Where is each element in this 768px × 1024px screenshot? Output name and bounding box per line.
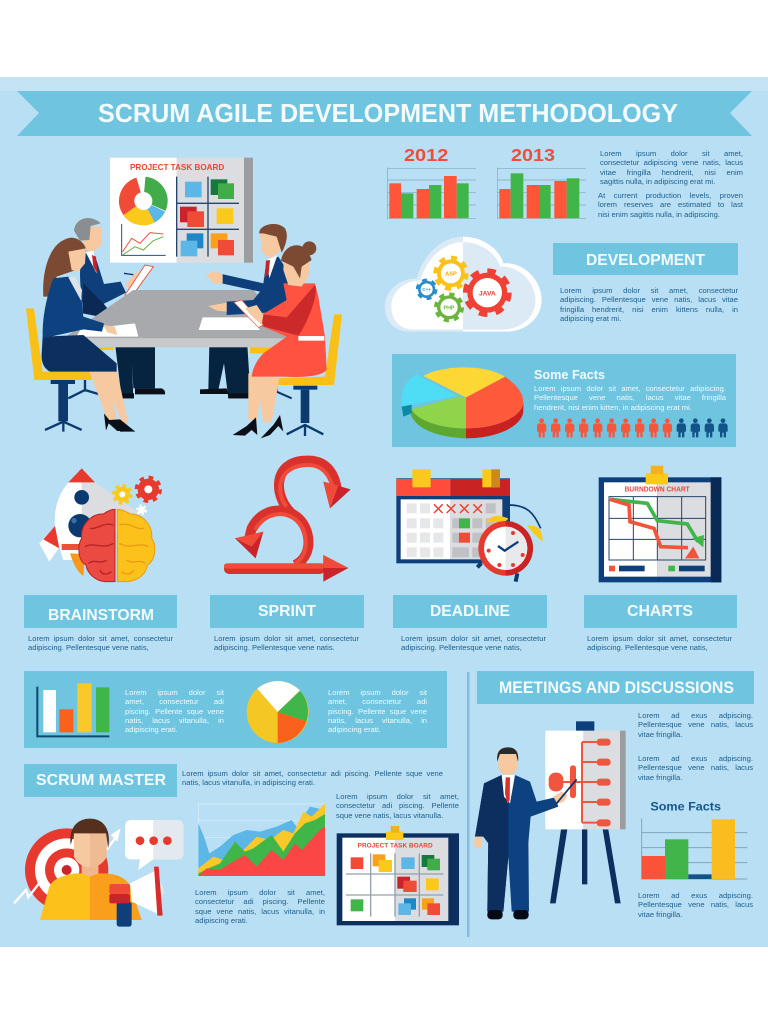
text block: brainstorm xyxy=(28,634,173,652)
chart 2013: 2013 xyxy=(511,145,555,165)
heading: scrum master: SCRUM MASTER xyxy=(36,772,166,789)
text block: intro paragraph two: nisi enim sagittis nulla, in adipiscing. xyxy=(598,210,720,219)
text block: charts: Lorem ipsum dolor sit amet, consectetur xyxy=(587,634,732,643)
meeting table xyxy=(63,290,300,353)
panel: statistics strip xyxy=(24,671,447,748)
area chart xyxy=(198,803,325,876)
text block: sprint xyxy=(214,634,359,652)
text block: meetings two: Pellentesque vene natis, lacus xyxy=(638,763,753,772)
text block: development: fringilla hendrerit, nisi enim kittens nulla, in xyxy=(560,305,738,314)
text block: deadline: adipiscing. Pellentesque vene natis, xyxy=(401,643,522,652)
gear: PHP: PHP xyxy=(444,305,455,311)
woman left xyxy=(42,238,135,432)
heading: sprint: SPRINT xyxy=(258,603,316,620)
title banner xyxy=(17,91,752,136)
text block: intro paragraph two: At current production levels, proven xyxy=(598,191,743,200)
column chart: some facts: Some Facts xyxy=(650,800,721,814)
text block: meetings three xyxy=(638,891,753,919)
heading: development: DEVELOPMENT xyxy=(586,252,705,269)
person xyxy=(40,819,142,920)
text block: below area chart: adipiscing erati. xyxy=(195,916,248,925)
icon: sprint arrows xyxy=(224,461,351,582)
gear: C++: C++ xyxy=(422,287,431,292)
man right xyxy=(200,224,293,398)
text block: deadline xyxy=(401,634,546,652)
heading: brainstorm: BRAINSTORM xyxy=(48,607,154,624)
text block: sprint: Lorem ipsum dolor sit amet, consectetur xyxy=(214,634,359,643)
text block: above task board xyxy=(336,792,459,820)
text block: strip right: Lorem ipsum dolor sit xyxy=(328,688,427,697)
text block: strip right: adipiscing erati. xyxy=(328,725,381,734)
text block: some facts: Lorem ipsum dolor sit amet, consectetur adipiscing. xyxy=(534,384,726,393)
megaphone xyxy=(109,867,163,927)
man with tablet xyxy=(74,218,165,398)
heading: meetings and discussions: MEETINGS AND DISCUSSIONS xyxy=(499,679,734,697)
small project task board xyxy=(337,826,459,925)
heading: deadline xyxy=(393,595,547,628)
text block: development: adipiscing. Pellentesque vene natis, lacus vitae xyxy=(560,295,738,304)
bar charts 2012 and 2013 xyxy=(385,145,586,332)
heading: deadline: DEADLINE xyxy=(430,603,510,620)
text block: brainstorm: adipiscing. Pellentesque vene natis, xyxy=(28,643,149,652)
heading: charts xyxy=(584,595,737,628)
text block: intro paragraph two: lorem reserves are estimated to last xyxy=(598,200,743,209)
chart 2012: 2012 xyxy=(404,145,448,165)
text block: strip left xyxy=(125,688,224,734)
icon: scrum master with target and megaphone xyxy=(14,819,183,927)
heading: sprint xyxy=(210,595,364,628)
text block: brainstorm: Lorem ipsum dolor sit amet, consectetur xyxy=(28,634,173,643)
alarm clock xyxy=(477,505,543,582)
calendar xyxy=(396,469,510,563)
text block: above task board: sque vene natis, lacus vitanulla. xyxy=(336,811,443,820)
3D pie chart xyxy=(401,367,523,438)
text block: strip right xyxy=(328,688,427,734)
project task board: PROJECT TASK BOARD xyxy=(130,162,224,172)
text block: above task board: consectetur adi piscing. Pellente xyxy=(336,801,459,810)
pie chart xyxy=(247,681,309,743)
text block: intro paragraph one: sagittis nulla, in adipiscing erat mi. xyxy=(600,177,715,186)
text block: strip left: amet, consectetur adi xyxy=(125,697,224,706)
panel: some facts: Some Facts xyxy=(534,367,605,382)
chairs xyxy=(26,308,342,436)
heading: charts: CHARTS xyxy=(627,603,693,620)
text block: scrum master intro xyxy=(182,769,443,787)
text block: meetings three: Pellentesque vene natis, lacus xyxy=(638,900,753,909)
pictogram row: 10 red and 4 navy people xyxy=(537,418,728,437)
text block: meetings two: vitae fringilla. xyxy=(638,773,682,782)
heading: development xyxy=(553,243,738,275)
heading: meetings and discussions xyxy=(477,671,754,704)
text block: charts: adipiscing. Pellentesque vene natis, xyxy=(587,643,708,652)
text block: meetings three: Lorem ad exus adpiscing. xyxy=(638,891,753,900)
text block: development: Lorem ipsum dolor sit amet, consectetur xyxy=(560,286,738,295)
text block: below area chart: sque vene natis, lacus vitanulla, in xyxy=(195,907,325,916)
gear: PHP xyxy=(436,294,462,320)
text block: meetings two: Lorem ad exus adpiscing. xyxy=(638,754,753,763)
project task board xyxy=(110,158,253,263)
small project task board: PROJECT TASK BOARD xyxy=(358,843,433,850)
text block: strip right: piscing. Pellente sque vene xyxy=(328,707,427,716)
man in suit xyxy=(474,747,577,919)
brain xyxy=(79,509,155,582)
text block: below area chart: consectetur adi piscing. Pellente xyxy=(195,897,325,906)
text block: meetings one xyxy=(638,711,753,739)
text block: strip left: adipiscing erati. xyxy=(125,725,178,734)
text block: intro paragraph two xyxy=(598,191,743,219)
text block: meetings one: Lorem ad exus adpiscing. xyxy=(638,711,753,720)
target xyxy=(14,828,121,912)
chart 2013 xyxy=(497,145,586,218)
text block: intro paragraph one xyxy=(600,149,743,186)
text block: scrum master intro: natis, lacus vitanulla, in adipiscing erati. xyxy=(182,778,315,787)
text block: development xyxy=(560,286,738,323)
icon: cloud with technology gears xyxy=(385,237,542,332)
text block: some facts: Pellentesque vene natis, lacus vitae fringilla xyxy=(534,393,726,402)
text block: charts xyxy=(587,634,732,652)
text block: strip left: piscing. Pellente sque vene xyxy=(125,707,224,716)
speech bubble xyxy=(125,820,183,870)
text block: some facts: hendrerit, nisi enim kitten, in adipiscing erat mi. xyxy=(534,403,692,412)
gear: ASP: ASP xyxy=(445,271,457,277)
panel: some facts xyxy=(392,354,736,447)
woman right xyxy=(233,241,327,438)
illustration: presenter at easel xyxy=(474,721,626,919)
gears xyxy=(113,477,160,515)
text block: below area chart xyxy=(195,888,325,925)
heading: scrum master xyxy=(24,764,177,797)
text block: above task board: Lorem ipsum dolor sit amet, xyxy=(336,792,459,801)
text block: meetings three: vitae fringilla. xyxy=(638,910,682,919)
icon: calendar and alarm clock xyxy=(396,469,543,582)
text block: scrum master intro: Lorem ipsum dolor sit amet, consectetur adi piscing. Pellente sque vene xyxy=(182,769,443,778)
text block: sprint: adipiscing. Pellentesque vene natis. xyxy=(214,643,335,652)
chart 2012 xyxy=(387,145,476,218)
text block: intro paragraph one: vitae fringilla hendrerit, nisi enim xyxy=(600,168,743,177)
text block: meetings two xyxy=(638,754,753,782)
gear: JAVA: JAVA xyxy=(479,290,496,297)
text block: strip right: natis, lacus vitanulla, in xyxy=(328,716,427,725)
illustration: team meeting around project task board xyxy=(26,158,342,438)
divider between sections xyxy=(467,672,470,937)
text block: strip left: Lorem ipsum dolor sit xyxy=(125,688,224,697)
text block: development: adipiscing erat mi. xyxy=(560,314,621,323)
gear: JAVA xyxy=(466,271,509,314)
text block: intro paragraph one: Lorem ipsum dolor sit amet, xyxy=(600,149,743,158)
title banner: SCRUM AGILE DEVELOPMENT METHODOLOGY xyxy=(98,98,678,128)
text block: meetings one: Pellentesque vene natis, lacus xyxy=(638,720,753,729)
text block: deadline: Lorem ipsum dolor sit amet, consectetur xyxy=(401,634,546,643)
icon: burndown chart: BURNDOWN CHART xyxy=(625,487,690,494)
text block: intro paragraph one: consectetur adipiscing vene natis, lacus xyxy=(600,158,743,167)
text block: below area chart: Lorem ipsum dolor sit amet, xyxy=(195,888,325,897)
text block: strip right: amet, consectetur adi xyxy=(328,697,427,706)
text block: some facts xyxy=(534,384,726,412)
text block: strip left: natis, lacus vitanulla, in xyxy=(125,716,224,725)
column chart: some facts xyxy=(642,800,747,879)
icon: burndown chart xyxy=(599,466,721,582)
icon: rocket and brain xyxy=(39,468,160,582)
bar chart xyxy=(37,683,109,736)
heading: brainstorm xyxy=(24,595,177,628)
text block: meetings one: vitae fringilla. xyxy=(638,730,682,739)
gear: ASP xyxy=(436,258,466,289)
easel with flowchart xyxy=(545,721,626,903)
gear: C++ xyxy=(417,280,436,299)
right man trousers xyxy=(208,345,251,398)
